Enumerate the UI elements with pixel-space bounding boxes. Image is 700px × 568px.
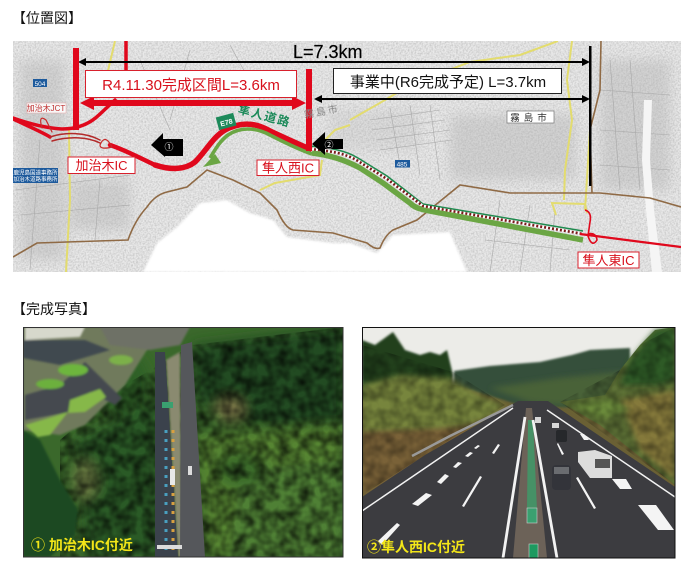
heading: completion photos: 【完成写真】 xyxy=(12,301,96,317)
route sign 504: 504 xyxy=(35,81,46,88)
median sign bottom xyxy=(529,544,538,558)
green sign gantry xyxy=(162,402,173,408)
sea xyxy=(143,200,467,272)
far white cars xyxy=(535,417,559,428)
river strip xyxy=(642,100,662,272)
route sign 504 xyxy=(33,79,47,87)
label: completed section xyxy=(86,70,296,98)
caption 1: ① 加治木IC付近 xyxy=(31,537,133,553)
left dry slope xyxy=(362,405,513,495)
sky xyxy=(362,327,675,387)
faint city name: 霧島市 xyxy=(303,102,341,121)
photo border xyxy=(362,328,675,558)
route sign 485: 485 xyxy=(397,162,408,168)
paddy fields xyxy=(58,364,88,376)
route badge E78 xyxy=(216,113,237,130)
road surface xyxy=(362,401,675,558)
urban density shading xyxy=(20,60,670,260)
stop line xyxy=(157,545,182,549)
roadside ground xyxy=(362,385,675,505)
left guardrail xyxy=(412,405,513,456)
route badge E78: E78 xyxy=(220,118,234,128)
white truck xyxy=(578,450,612,478)
office label: 鹿児島国道事務所 xyxy=(13,168,58,176)
mid hills xyxy=(490,372,640,405)
arrow 1 xyxy=(151,133,183,157)
yellow roads xyxy=(66,41,590,272)
panel: road photo near Hayato-nishi IC xyxy=(362,327,675,558)
road median strip xyxy=(166,352,182,557)
mid marker red xyxy=(306,69,312,151)
left bamboo bank xyxy=(362,375,505,435)
street grids xyxy=(15,45,670,272)
road right carriageway xyxy=(180,342,205,557)
median sign lower xyxy=(527,508,537,523)
route name: 隼人道路 xyxy=(237,101,293,130)
total length text: L=7.3km xyxy=(293,42,363,62)
arrow 2 xyxy=(312,132,343,155)
end marker black xyxy=(589,46,592,186)
start marker red xyxy=(73,48,79,130)
left dark trees xyxy=(362,332,453,400)
forest base xyxy=(23,327,343,557)
route sign 485 xyxy=(395,160,410,168)
label: Hayato-nishi IC: 隼人西IC xyxy=(262,160,314,176)
planned route (green with dashed line) xyxy=(203,129,583,240)
map texture xyxy=(13,41,681,272)
leaf texture xyxy=(60,327,343,557)
east interchange xyxy=(580,210,681,247)
forest colour patches xyxy=(73,327,343,557)
completed section arrow xyxy=(80,98,306,110)
median green signs xyxy=(527,420,537,510)
label: under construction: 事業中(R6完成予定) L=3.7km xyxy=(350,74,546,91)
lane dashes xyxy=(378,434,674,545)
label: Kirishima city: 霧島市 xyxy=(510,112,551,124)
dark car far xyxy=(556,430,567,442)
panel: location map xyxy=(13,41,681,272)
right bank vegetation xyxy=(560,327,675,485)
office label: 加治木道路事務所 xyxy=(13,175,58,183)
distant hills xyxy=(454,348,630,410)
completed route and JCT xyxy=(13,41,310,168)
arrow 1: ① xyxy=(164,142,174,152)
label: Hayato-higashi IC: 隼人東IC xyxy=(582,253,635,268)
median xyxy=(513,408,547,558)
heading: location map: 【位置図】 xyxy=(12,10,82,26)
map base xyxy=(13,41,681,272)
label: Kajiki JCT: 加治木JCT xyxy=(27,103,65,113)
road left carriageway xyxy=(155,352,178,557)
photo border xyxy=(24,328,343,557)
label: Kajiki IC: 加治木IC xyxy=(75,158,128,173)
road edge lines xyxy=(362,408,675,558)
caption 2: ②隼人西IC付近 xyxy=(367,539,465,555)
vegetation texture left xyxy=(362,345,505,495)
office label xyxy=(13,168,58,183)
cedar forest lower left xyxy=(23,430,78,557)
white car xyxy=(188,466,192,475)
total length arrow xyxy=(78,58,590,66)
brown railway line xyxy=(13,41,681,257)
white truck xyxy=(170,469,175,485)
vegetation texture right xyxy=(560,327,675,485)
road lane paint orange xyxy=(172,430,174,553)
under construction arrow xyxy=(314,95,590,103)
road lane paint blue xyxy=(164,430,168,553)
label: under construction xyxy=(334,68,562,94)
dark car front xyxy=(552,465,571,490)
panel: aerial photo near Kajiki IC xyxy=(23,327,343,557)
label: completed section: R4.11.30完成区間L=3.6km xyxy=(102,77,280,94)
arrow 2: ② xyxy=(324,140,334,150)
town xyxy=(23,327,160,435)
